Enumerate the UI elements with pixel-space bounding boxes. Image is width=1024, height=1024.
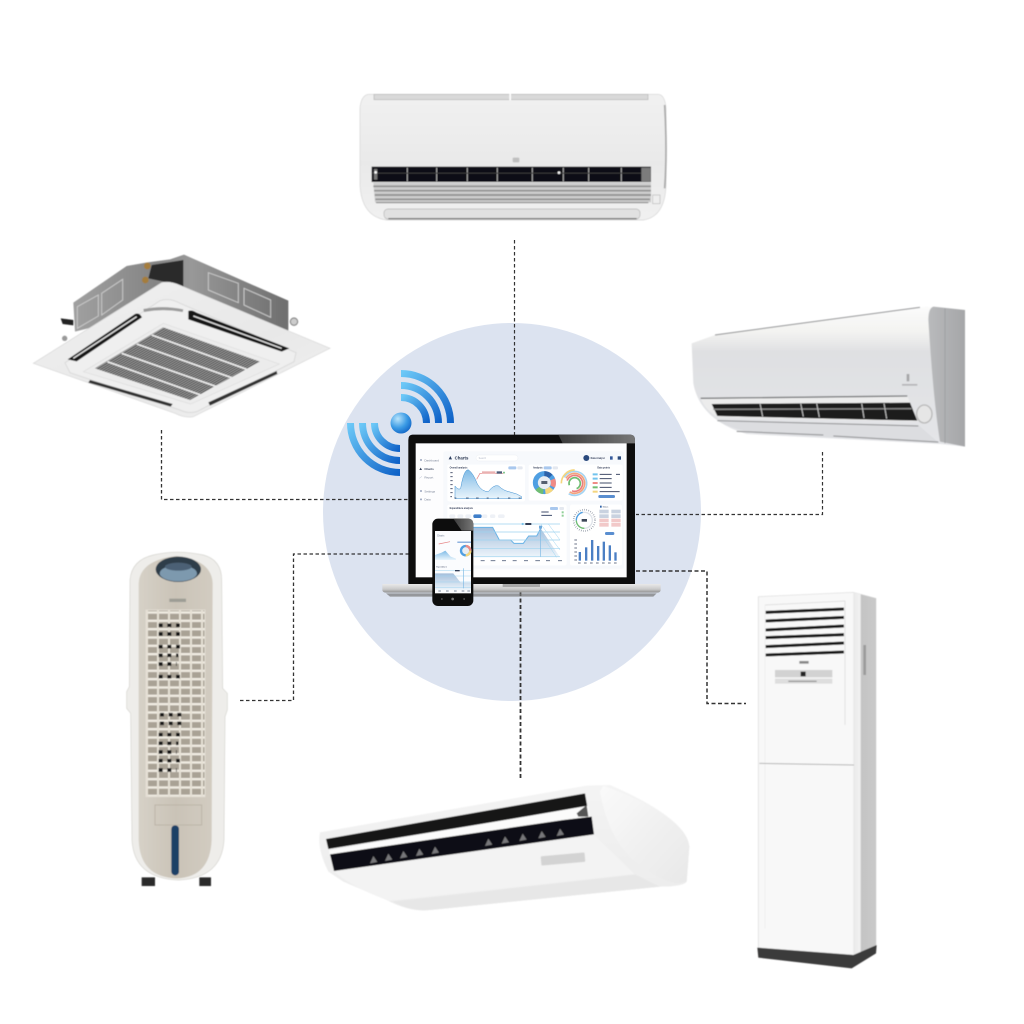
- dashboard header: Charts: [455, 456, 469, 461]
- chart: gauge, data table and bar chart: [570, 505, 622, 565]
- connector: angled wall unit to hub: [636, 452, 822, 514]
- connector: cassette unit to hub: [162, 430, 409, 500]
- connector: wall unit to hub: [514, 240, 516, 436]
- unit: angled wall-mounted air conditioner: [692, 307, 965, 447]
- smartphone with mobile dashboard: Charts: [437, 535, 445, 538]
- chart: gauge, data table and bar chart: Status: [603, 506, 608, 509]
- sidebar navigation: [419, 458, 439, 502]
- connector: ceiling unit to hub: [520, 592, 522, 779]
- chart: analysis donut charts and legend: Analysis: [533, 467, 543, 470]
- unit: floor-standing air conditioner: [757, 592, 877, 968]
- laptop bezel: [408, 435, 635, 584]
- sidebar navigation: Data: [424, 498, 431, 502]
- smartphone with mobile dashboard: [432, 519, 473, 606]
- sidebar navigation: Report: [424, 475, 433, 479]
- dashboard header: Data Analyst: [591, 457, 605, 460]
- unit: ceiling-suspended air conditioner: [319, 785, 689, 910]
- connector: floor unit to hub: [636, 571, 746, 704]
- chart: analysis donut charts and legend: Data points: [597, 467, 611, 470]
- chart: analysis donut charts and legend: [529, 465, 623, 501]
- chart: overall analysis area chart: Overall analysis: [450, 468, 468, 470]
- sidebar navigation: Settings: [424, 489, 436, 493]
- wifi signal icon: [350, 374, 450, 472]
- chart: expenditure analysis line chart: Expenditure analysis: [450, 507, 474, 510]
- sidebar navigation: Dashboard: [424, 458, 439, 462]
- laptop base: [382, 584, 661, 597]
- unit: evaporative tower cooler: [127, 552, 227, 886]
- central hub circle: [323, 323, 701, 701]
- unit: top wall-mounted air conditioner: [360, 94, 666, 220]
- chart: expenditure analysis line chart: [447, 505, 567, 565]
- sidebar navigation: Charts: [424, 467, 434, 471]
- unit: ceiling cassette air conditioner: [33, 255, 330, 417]
- dashboard header: Search: [479, 457, 487, 460]
- laptop with analytics dashboard: [382, 435, 661, 597]
- smartphone with mobile dashboard: Expenditure: [436, 566, 448, 569]
- chart: overall analysis area chart: [447, 465, 525, 501]
- connector: tower cooler to hub: [240, 554, 409, 700]
- dashboard header: [443, 451, 624, 569]
